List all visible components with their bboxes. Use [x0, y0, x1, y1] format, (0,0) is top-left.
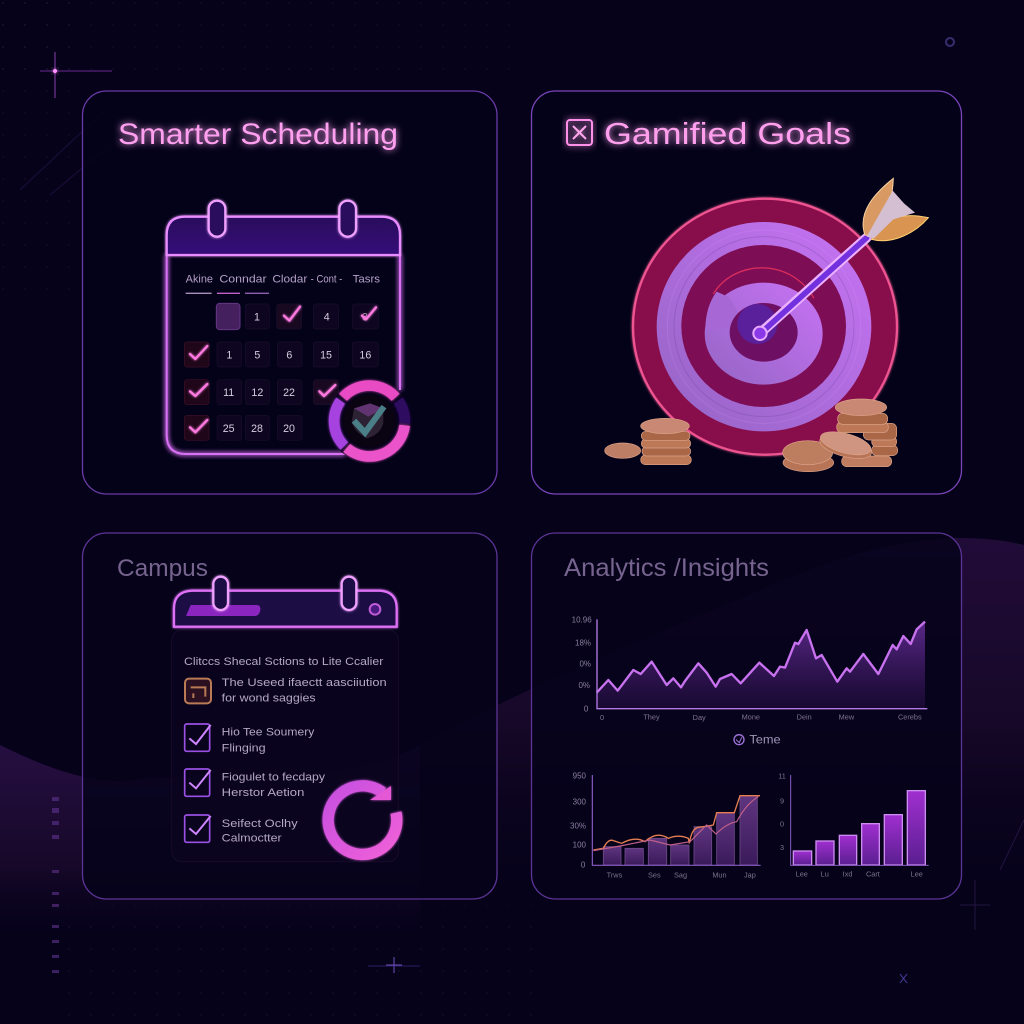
date numbers: 22 [283, 387, 295, 399]
icon: checkbox [567, 120, 592, 145]
task list intro: Clitccs Shecal Sctions to Lite Ccalier [184, 656, 384, 668]
bar axes [791, 775, 929, 865]
y axis labels: 0 [584, 704, 589, 713]
y axis labels: 0% [578, 681, 590, 690]
x axis labels: Ixd [843, 870, 852, 879]
x axis labels: Mone [742, 712, 760, 721]
date numbers: 16 [359, 349, 371, 361]
panel: analytics insights [532, 533, 962, 899]
binder ring left [209, 201, 225, 237]
x axis labels [607, 870, 756, 879]
target illustration [605, 178, 928, 472]
date numbers: 25 [223, 423, 235, 435]
task item 1: Hio Tee Soumery [222, 727, 315, 739]
calendar header [174, 591, 397, 627]
task item 3 [185, 815, 298, 844]
date numbers: 1 [254, 311, 260, 323]
trend line: orange [593, 796, 760, 850]
bar chart: purple [778, 771, 929, 879]
bars [603, 796, 757, 865]
y axis labels [778, 771, 786, 852]
y axis labels: 3 [780, 843, 784, 852]
task item 2 [185, 769, 325, 799]
trend line: pink [593, 797, 758, 851]
arrow [753, 178, 928, 340]
legend: time: Teme [749, 733, 781, 747]
task item 1 [185, 724, 315, 755]
heading: campus: Campus [117, 555, 208, 582]
x axis labels: Lu [821, 870, 829, 879]
panel: smarter scheduling [82, 91, 497, 494]
bar chart axes [592, 775, 761, 865]
task item 2: Fiogulet to fecdapy [222, 771, 325, 783]
y axis labels [572, 615, 592, 713]
heading: gamified goals: Gamified Goals [604, 116, 851, 151]
line chart [572, 615, 927, 747]
coin stack: left [605, 418, 691, 465]
calendar tabs: Tasrs [353, 274, 381, 286]
calendar header [167, 217, 400, 255]
legend: time [734, 733, 781, 747]
coins: front [783, 427, 874, 472]
x axis labels: Cart [866, 870, 880, 879]
y axis labels: 10.96 [572, 615, 592, 624]
date grid [184, 304, 378, 440]
target board [633, 199, 897, 455]
binder ring right [342, 577, 356, 610]
purple bars [793, 791, 925, 865]
binder ring left [213, 577, 228, 610]
task item 2: Herstor Aetion [222, 787, 304, 799]
panel: campus [82, 533, 497, 899]
chart line [597, 622, 925, 693]
date numbers: 11 [223, 387, 234, 399]
x axis labels: Jap [744, 870, 756, 879]
selected day [216, 303, 240, 330]
header pill [186, 605, 260, 616]
x axis labels: Day [693, 713, 706, 722]
date numbers: 3 [362, 311, 368, 323]
calendar body [167, 255, 400, 454]
calendar tabs [186, 274, 381, 286]
x axis labels: Sag [674, 870, 687, 879]
x axis labels: Dein [797, 712, 812, 721]
header dot [370, 604, 380, 615]
task item 3: Seifect Oclhy [222, 818, 298, 830]
progress donut [328, 379, 411, 463]
calendar tabs: Clodar [272, 274, 308, 286]
task item 1: Flinging [222, 743, 266, 755]
chart area [597, 622, 925, 708]
date numbers: 5 [254, 349, 260, 361]
calendar tabs: - Cont - [311, 274, 343, 286]
task item 3: Calmoctter [222, 832, 282, 844]
x axis labels [796, 870, 923, 879]
task text: for wond saggies [222, 692, 316, 704]
y axis labels: 0% [579, 660, 591, 669]
x axis labels: Mew [839, 712, 855, 721]
task text: The Useed ifaectt aasciiution [222, 677, 387, 689]
panel: gamified goals [532, 91, 962, 494]
task card [172, 630, 398, 862]
bar chart: combined [570, 772, 761, 879]
date numbers: 12 [251, 387, 263, 399]
coin stack: right [835, 399, 898, 467]
date numbers: 6 [286, 349, 292, 361]
y axis labels: 30% [570, 821, 586, 830]
y axis labels: 0 [581, 861, 586, 870]
x axis labels: Mun [712, 870, 727, 879]
y axis labels: 950 [573, 772, 587, 781]
x axis labels: Lee [911, 870, 923, 879]
task list illustration [172, 577, 398, 862]
date numbers: 15 [320, 349, 332, 361]
calendar tabs: Conndar [219, 274, 267, 286]
calendar illustration [167, 201, 411, 463]
date numbers: 4 [324, 311, 330, 323]
heading: smarter scheduling: Smarter Scheduling [118, 118, 398, 151]
date numbers: 1 [226, 349, 232, 361]
icon: refresh arrow [328, 786, 397, 854]
y axis labels [570, 772, 587, 870]
date numbers [223, 311, 371, 435]
x axis labels: Trws [607, 870, 623, 879]
icon: orange badge [185, 679, 211, 703]
x axis labels: Cerebs [898, 712, 922, 721]
x axis labels: They [643, 712, 660, 721]
x axis labels [600, 712, 922, 722]
y axis labels: 11 [778, 771, 786, 780]
binder ring right [339, 201, 356, 237]
chart axes [597, 619, 927, 709]
check marks [190, 307, 376, 432]
y axis labels: 9 [780, 796, 784, 805]
calendar tabs: Akine [186, 274, 213, 286]
x axis labels: 0 [600, 713, 604, 722]
date numbers: 20 [283, 423, 295, 435]
x axis labels: Lee [796, 870, 808, 879]
y axis labels: 18% [575, 639, 591, 648]
x axis labels: Ses [648, 870, 661, 879]
y axis labels: 100 [573, 840, 587, 849]
heading: analytics insights: Analytics /Insights [564, 554, 769, 582]
y axis labels: 300 [573, 797, 587, 806]
date numbers: 28 [251, 423, 263, 435]
y axis labels: 0 [780, 820, 784, 829]
